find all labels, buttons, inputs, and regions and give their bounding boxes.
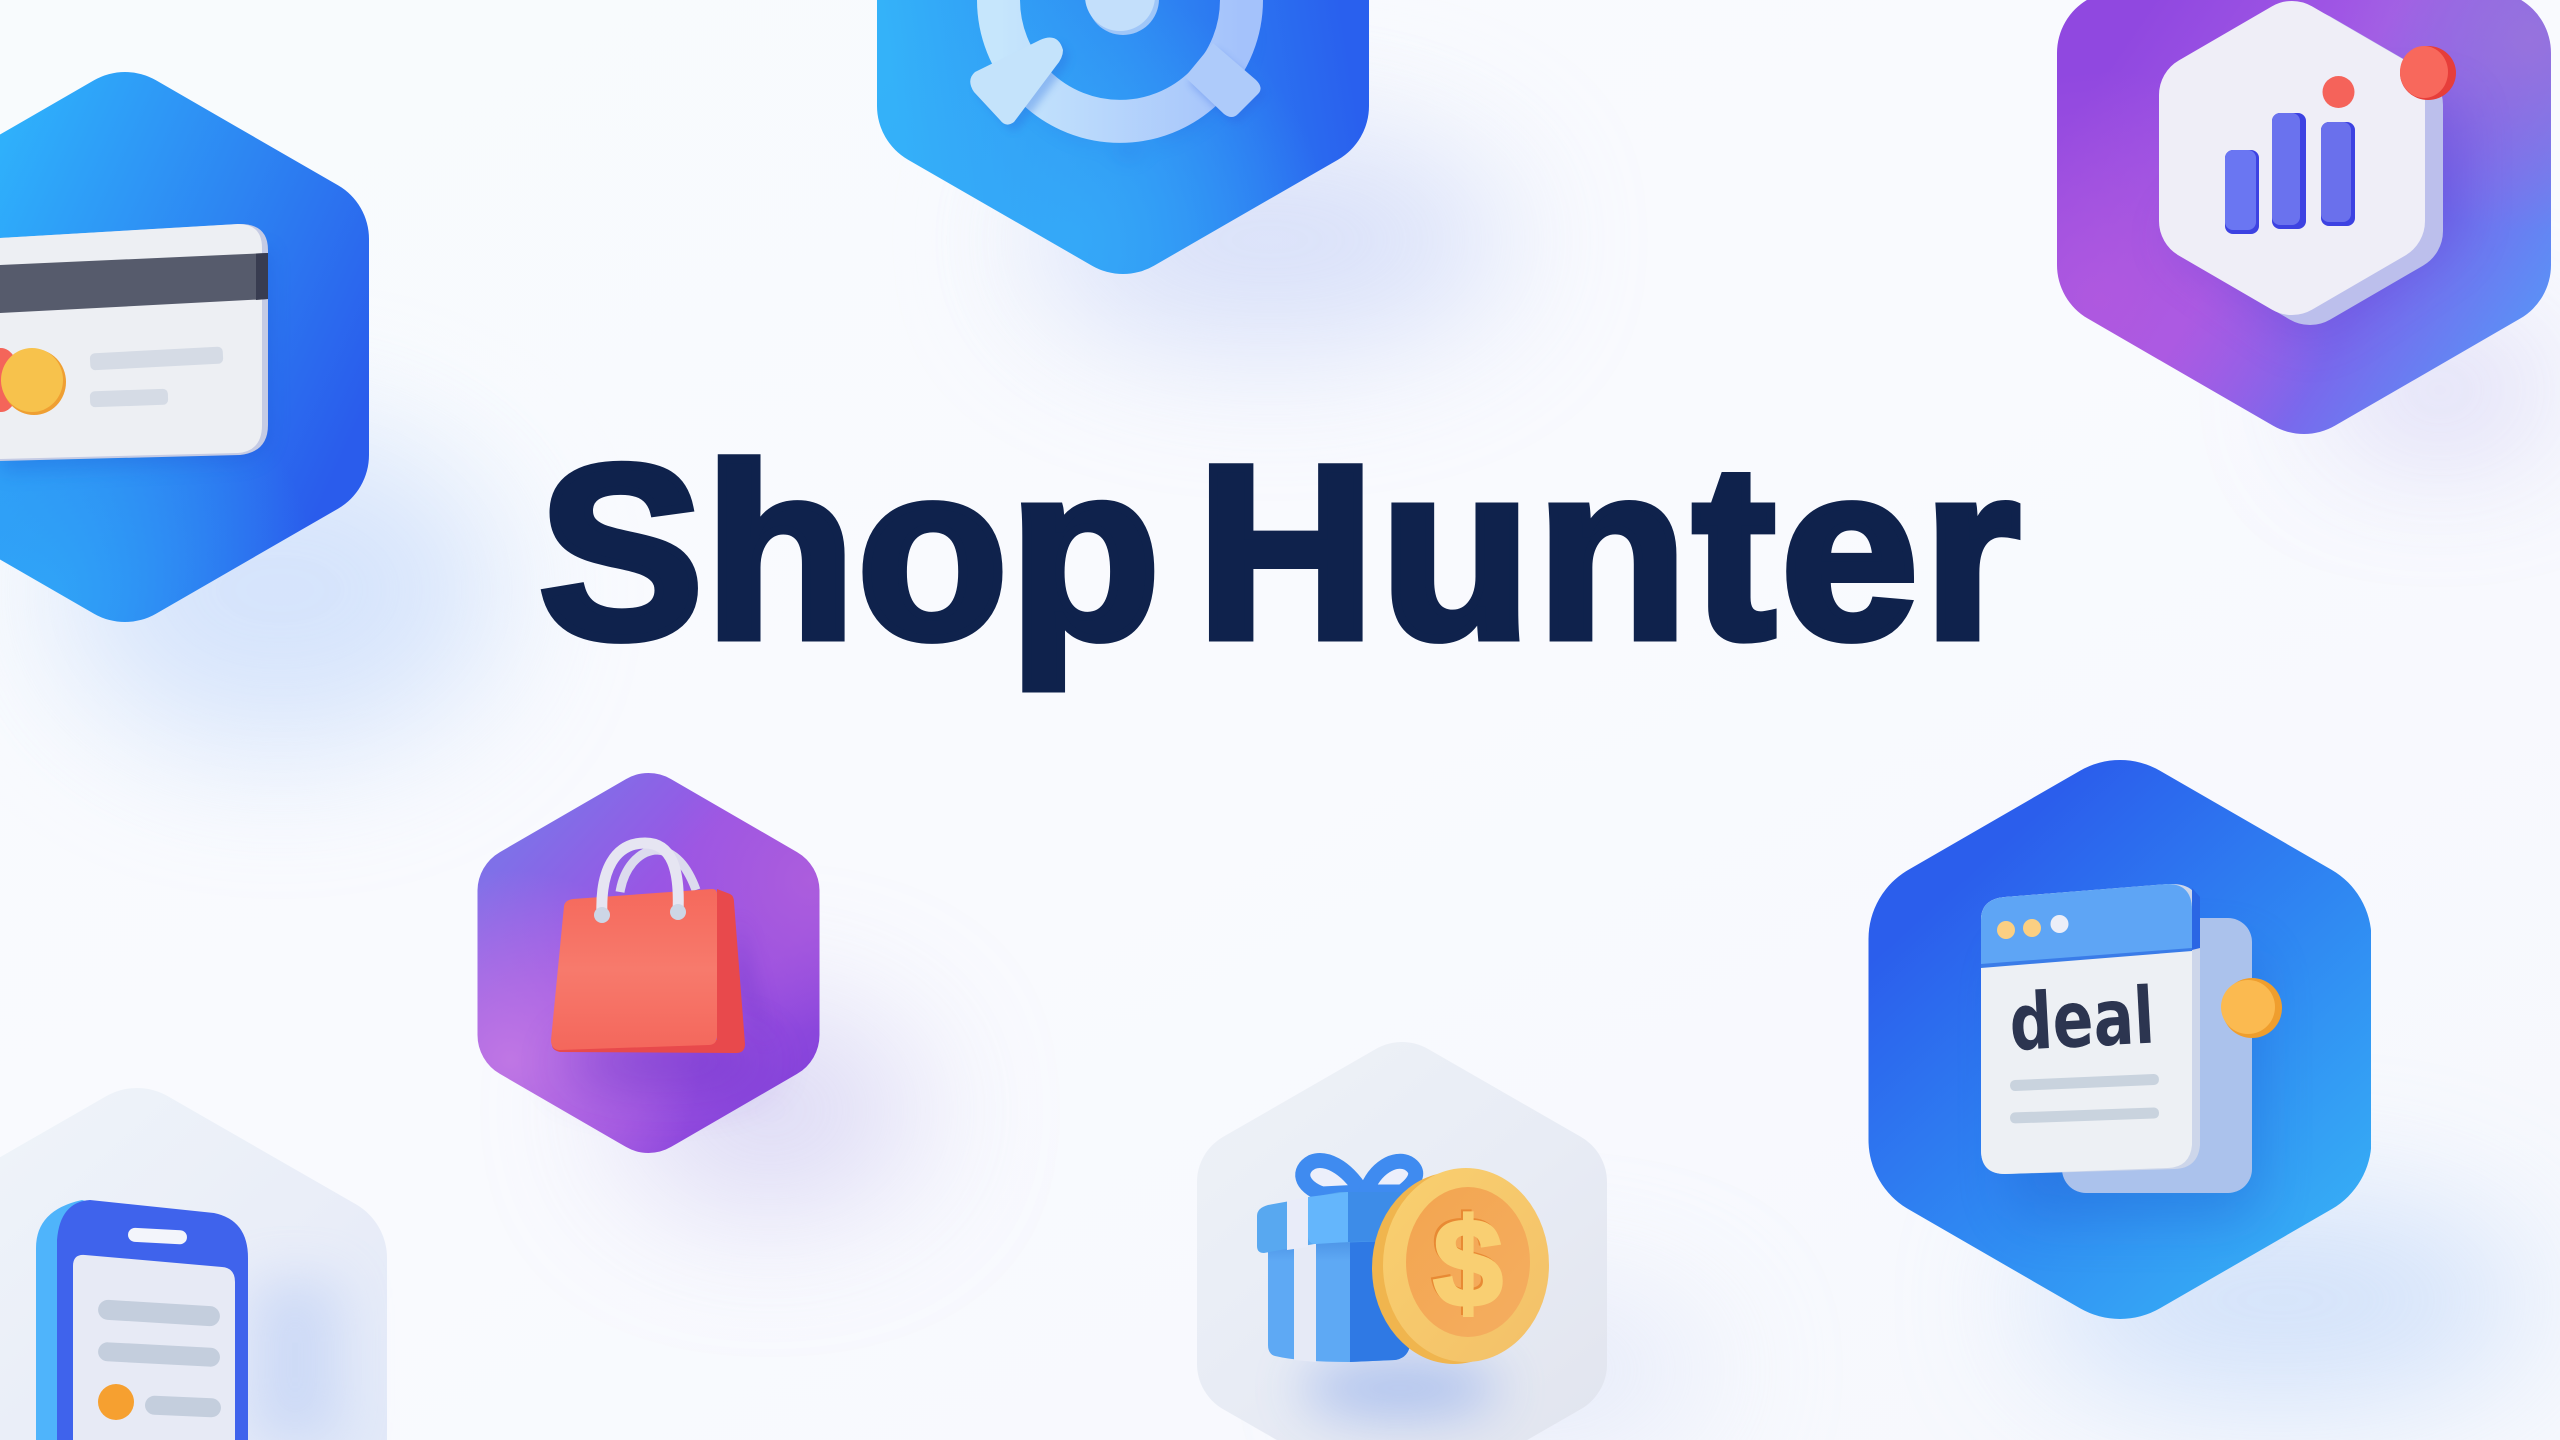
coins — [0, 348, 66, 415]
panel: credit card hexagon — [0, 72, 370, 622]
back page — [2062, 918, 2252, 1193]
front page — [1981, 884, 2200, 1174]
page header — [1981, 884, 2200, 968]
right arrow tab — [1185, 43, 1265, 123]
speaker — [128, 1227, 187, 1245]
gold coin: $ — [1434, 1195, 1502, 1333]
heading: title: Hunter — [1197, 415, 2026, 690]
phone side — [36, 1200, 100, 1440]
target centre dot — [1085, 0, 1159, 35]
icon: target with arrows — [970, 0, 1265, 160]
icon: smartphone — [36, 1200, 340, 1440]
panel: phone hexagon — [0, 1088, 387, 1440]
card text lines — [90, 347, 223, 407]
deal label: deal — [2007, 971, 2157, 1069]
icon: white hexagon tile with chart — [2170, 41, 2460, 340]
orange dot — [2221, 978, 2282, 1038]
box lid — [1257, 1192, 1405, 1253]
panel: target hexagon — [877, 0, 1370, 274]
handle knobs — [594, 904, 686, 923]
panel: analytics hexagon — [2057, 0, 2552, 434]
back handle — [620, 850, 696, 892]
panel: gift hexagon — [1197, 1042, 1607, 1440]
window dots — [1997, 915, 2068, 939]
panel: shopping bag hexagon — [477, 773, 820, 1153]
box body — [1268, 1236, 1410, 1362]
panel: deal hexagon — [1868, 760, 2371, 1319]
left arrow head — [970, 38, 1069, 131]
large red badge — [2400, 46, 2456, 100]
screen — [73, 1255, 235, 1440]
bar chart — [2225, 113, 2355, 234]
phone front — [57, 1200, 248, 1440]
small red dot — [2322, 76, 2354, 108]
icon: gift box with coin — [1257, 1161, 1549, 1418]
magnetic stripe — [0, 253, 268, 313]
gold coin — [1372, 1168, 1549, 1364]
screen lines — [98, 1299, 221, 1420]
heading: title: Shop — [539, 415, 1232, 690]
text lines — [2010, 1074, 2159, 1124]
icon: shopping bag — [551, 843, 769, 1088]
bag front — [551, 889, 717, 1050]
icon: credit card — [0, 224, 270, 472]
front handle — [602, 843, 678, 915]
ribbon bow — [1303, 1161, 1416, 1194]
bag side — [552, 889, 745, 1053]
icon: deal document — [1981, 884, 2282, 1220]
